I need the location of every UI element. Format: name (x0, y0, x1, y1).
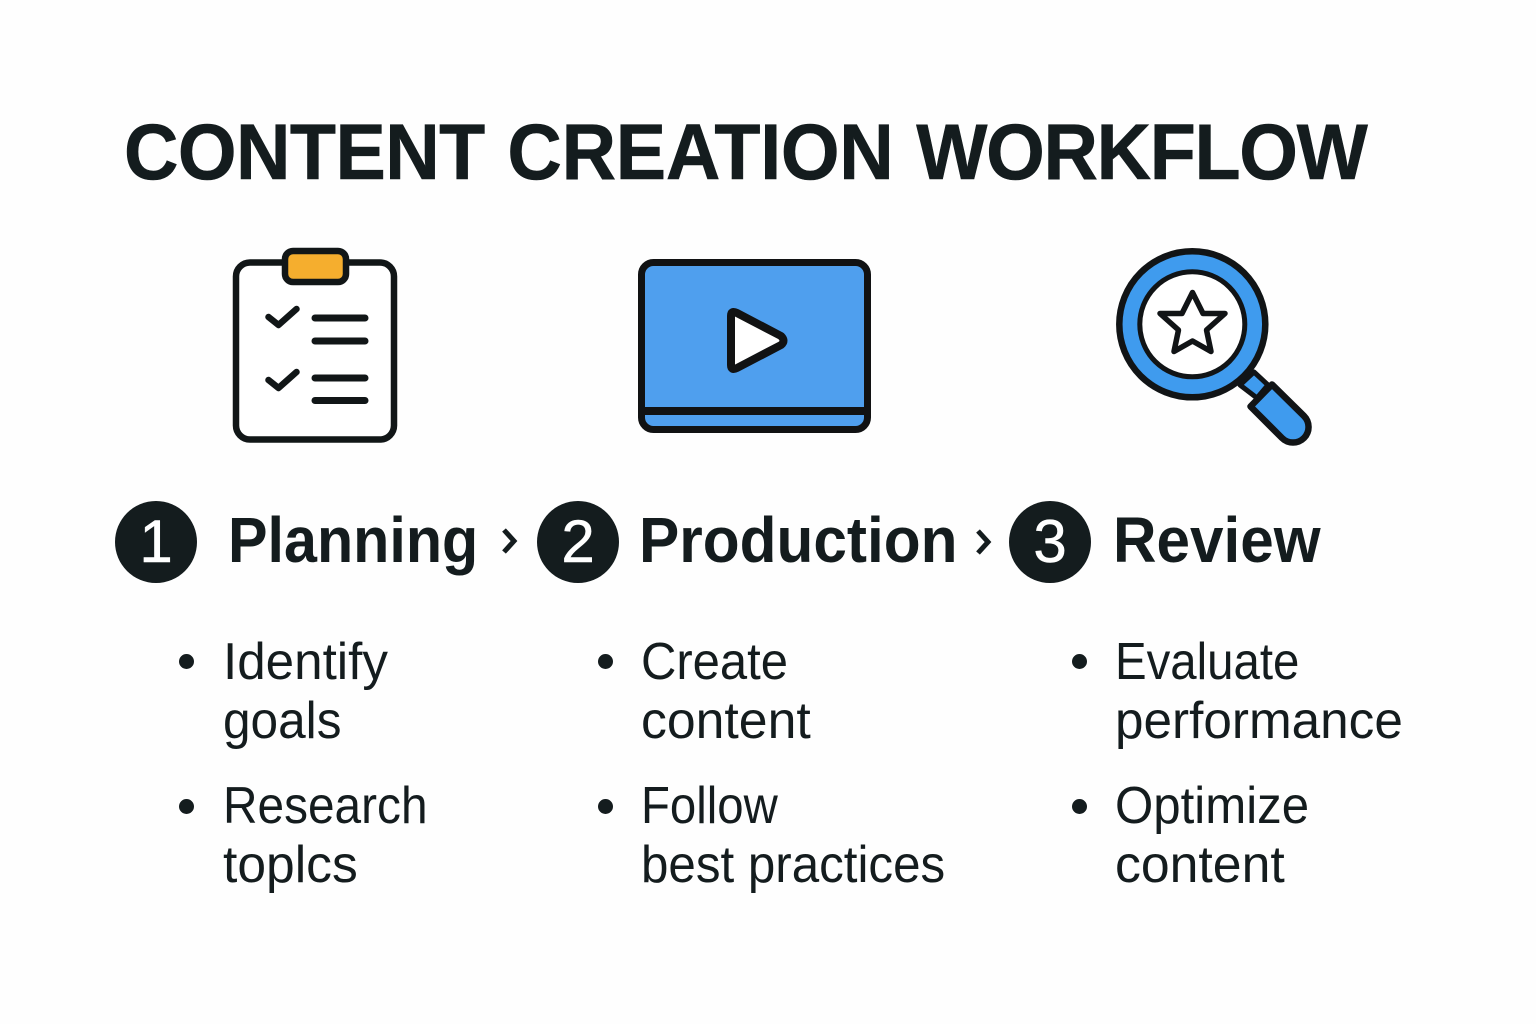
icon: video player (638, 259, 871, 433)
production bullet 2: best practices (641, 836, 945, 894)
step 3 heading: Review (1113, 504, 1321, 576)
arrow: planning to production (502, 528, 518, 554)
production bullet 1: content (641, 692, 811, 750)
step 3 number: 3 (1033, 508, 1067, 575)
arrow: production to review (976, 529, 992, 555)
production bullet 1: Create (641, 633, 788, 691)
planning bullet 2 (179, 777, 428, 894)
planning bullet 2: Research (223, 777, 428, 835)
step 3 number (1009, 501, 1091, 583)
planning bullet 2: toplcs (223, 836, 358, 894)
step 1 heading: Planning (228, 504, 478, 576)
step 2 number (537, 501, 619, 583)
review bullet 1: performance (1115, 692, 1403, 750)
review bullet 2: Optimize (1115, 777, 1309, 835)
production bullet 2 (598, 777, 945, 894)
step 2 heading: Production (639, 504, 957, 576)
icon: clipboard checklist (232, 248, 398, 443)
planning bullet 1: Identify (223, 633, 388, 691)
production bullet 1 (598, 633, 811, 750)
planning bullet 1 (179, 633, 388, 750)
review bullet 1: Evaluate (1115, 633, 1299, 691)
step 2 number: 2 (561, 508, 595, 575)
review bullet 2: content (1115, 836, 1285, 894)
title: CONTENT CREATION WORKFLOW (124, 107, 1367, 196)
step 1 number: 1 (139, 508, 173, 575)
production bullet 2: Follow (641, 777, 778, 835)
step 1 number (115, 501, 197, 583)
planning bullet 1: goals (223, 692, 341, 750)
icon: magnifying glass with star (1116, 248, 1312, 446)
review bullet 2 (1072, 777, 1309, 894)
review bullet 1 (1072, 633, 1403, 750)
